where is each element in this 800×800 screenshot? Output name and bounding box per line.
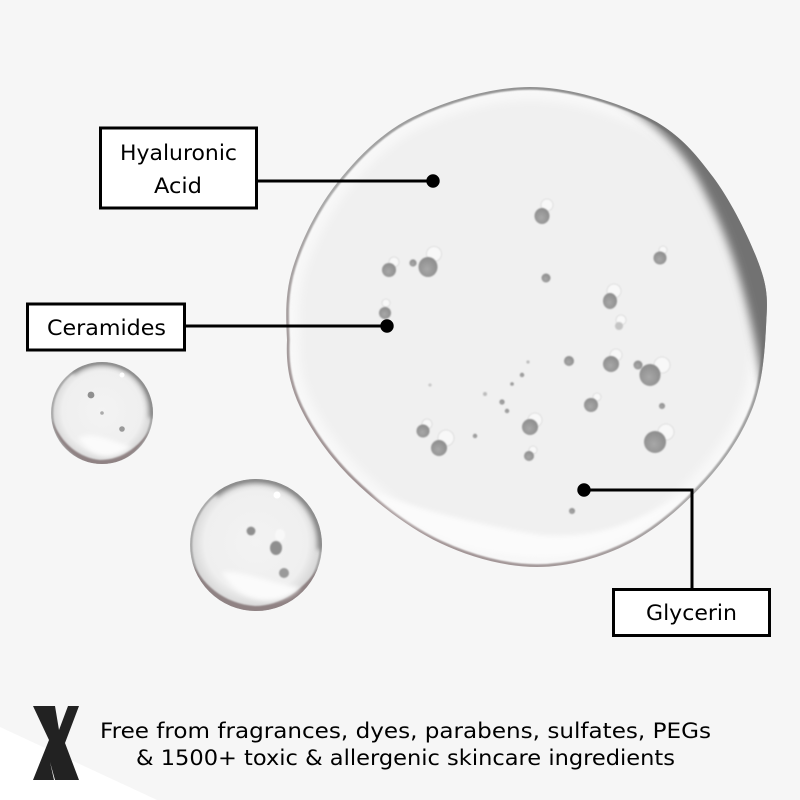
- callout: Hyaluronic Acid: Acid: [154, 174, 202, 198]
- footer statement: Free from fragrances, dyes, parabens, sulfates, PEGs: [100, 719, 711, 744]
- icon: X logo: [33, 706, 79, 780]
- callout: Glycerin: [577, 483, 770, 636]
- callout: Hyaluronic Acid: Hyaluronic: [120, 141, 237, 165]
- footer statement: & 1500+ toxic & allergenic skincare ingredients: [136, 746, 675, 771]
- callout: Hyaluronic Acid: [100, 128, 440, 208]
- bubbles inside droplet: [379, 199, 674, 514]
- small droplet, lower: [189, 479, 322, 612]
- soft highlight, bottom: [372, 495, 687, 552]
- callout: Ceramides: [28, 304, 394, 350]
- large serum droplet: [286, 85, 790, 567]
- dark crescent, top right: [616, 104, 767, 384]
- small droplet, left: [51, 362, 153, 466]
- footer statement: [100, 719, 711, 771]
- callout: Glycerin: Glycerin: [646, 601, 737, 625]
- callout: Ceramides: Ceramides: [47, 316, 166, 340]
